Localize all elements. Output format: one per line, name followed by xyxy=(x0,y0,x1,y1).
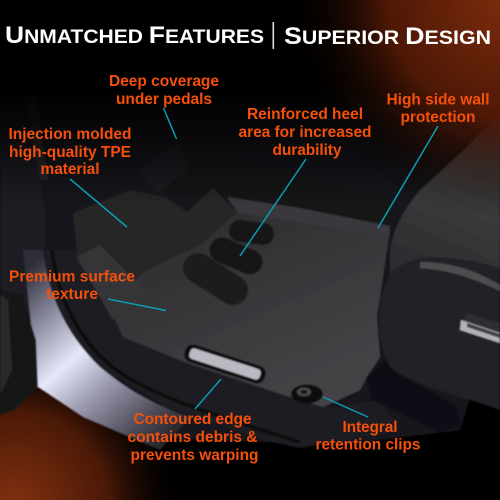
callout: premium surface: Premium surface xyxy=(9,268,135,286)
retention clip xyxy=(291,384,323,404)
callout: integral clips xyxy=(316,397,420,454)
car interior scene xyxy=(0,90,500,450)
side wall ridge xyxy=(350,93,467,139)
callout: reinforced heel xyxy=(238,106,372,256)
callout: high side wall: High side wall xyxy=(386,92,490,108)
callout: injection molded: Injection molded xyxy=(8,126,132,143)
heading divider xyxy=(272,22,274,49)
silver heel plate xyxy=(182,342,268,386)
seat cushion xyxy=(390,113,500,290)
callout: deep coverage xyxy=(109,73,219,139)
callout: reinforced heel: durability xyxy=(272,142,342,159)
top fade into black xyxy=(0,85,500,210)
callout: reinforced heel: Reinforced heel xyxy=(247,106,363,123)
seat base trim xyxy=(379,257,500,410)
heading left: UNMATCHED FEATURES xyxy=(5,22,264,49)
callout: injection molded: material xyxy=(40,161,100,178)
lighter footrest xyxy=(77,245,147,320)
callout: contoured edge: prevents warping xyxy=(130,447,258,464)
callout: premium surface: texture xyxy=(46,286,98,303)
seat adjustment lever xyxy=(460,313,500,343)
callout: injection molded: high-quality TPE xyxy=(9,144,131,161)
title xyxy=(5,22,491,50)
floor mat surface xyxy=(107,211,390,407)
door pillar xyxy=(0,95,45,325)
callout: reinforced heel: area for increased xyxy=(238,124,372,141)
rear carpet ledge xyxy=(165,150,395,226)
seat foot shadow xyxy=(367,360,462,432)
heading right: SUPERIOR DESIGN xyxy=(284,23,491,50)
brake and accelerator pedals xyxy=(137,133,211,193)
callout: premium surface xyxy=(9,268,166,310)
door panel xyxy=(0,290,38,415)
door sill xyxy=(23,250,190,450)
mat upper ridge xyxy=(227,197,390,238)
orange glow: bottom left xyxy=(0,300,260,500)
callout: high side wall xyxy=(378,92,490,228)
callout: contoured edge: Contoured edge xyxy=(134,411,252,428)
sill trim and rubber seal xyxy=(43,250,400,448)
callout: injection molded xyxy=(8,126,132,227)
firewall and carpet xyxy=(0,90,500,445)
callout: deep coverage: under pedals xyxy=(116,91,212,108)
orange glow: top right xyxy=(250,0,500,230)
dark heel pads xyxy=(198,231,263,290)
callout: integral clips: retention clips xyxy=(316,436,420,454)
seat xyxy=(367,113,500,432)
callout: high side wall: protection xyxy=(400,109,476,126)
mat front section xyxy=(73,188,238,305)
callout: contoured edge: contains debris & xyxy=(128,429,258,446)
callout: contoured edge xyxy=(128,379,258,464)
callout: integral clips: Integral xyxy=(342,419,398,436)
callout: deep coverage: Deep coverage xyxy=(109,73,219,90)
